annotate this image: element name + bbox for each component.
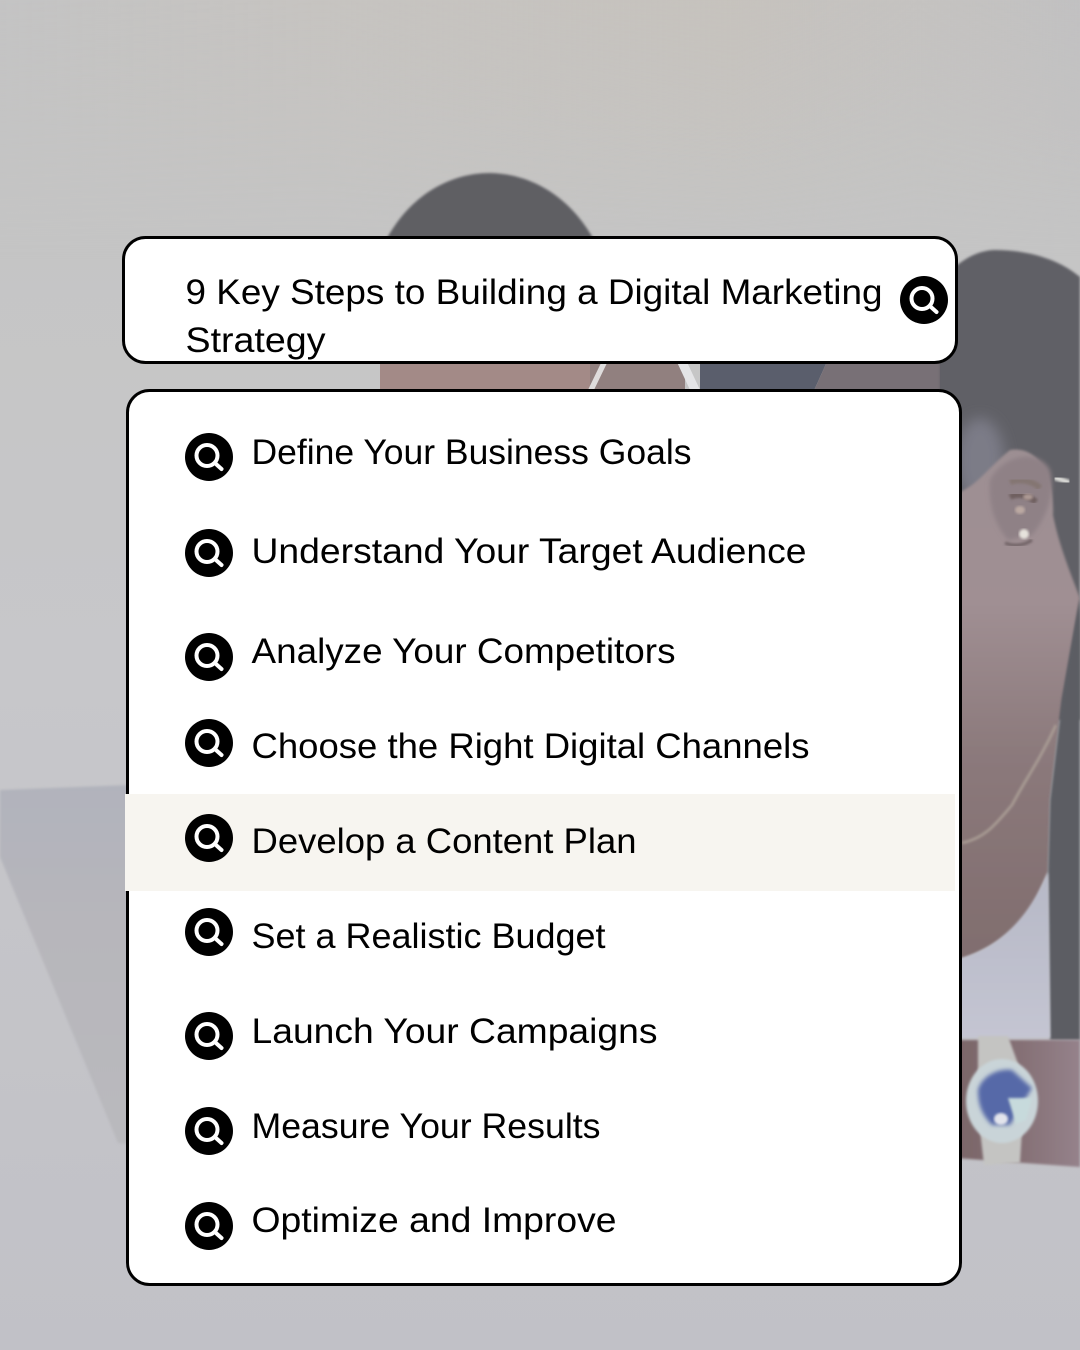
label: step 2: Understand Your Target Audience xyxy=(252,532,806,571)
title text: 9 Key Steps to Building a Digital Marketing xyxy=(186,273,882,312)
title text: Strategy xyxy=(186,321,326,360)
icon: search xyxy=(185,433,233,481)
icon: search xyxy=(185,529,233,577)
label: step 9: Optimize and Improve xyxy=(252,1201,616,1240)
highlighted row xyxy=(125,794,955,891)
woman: necklace xyxy=(962,725,1056,843)
step 3 xyxy=(185,632,676,681)
label: step 7: Launch Your Campaigns xyxy=(252,1012,658,1051)
step 5 xyxy=(185,814,636,862)
label: step 3: Analyze Your Competitors xyxy=(252,632,676,671)
icon: search xyxy=(185,1202,233,1250)
step 7 xyxy=(185,1012,658,1060)
step 2 xyxy=(185,529,806,577)
icon: search xyxy=(185,719,233,767)
step 4 xyxy=(185,719,810,767)
woman: white top xyxy=(955,872,1050,1038)
icon: search xyxy=(185,1107,233,1155)
woman: ear xyxy=(990,457,1068,545)
label: step 6: Set a Realistic Budget xyxy=(252,917,606,956)
step 1 xyxy=(185,433,692,481)
icon: search xyxy=(185,633,233,681)
woman: neck and shoulder skin xyxy=(950,450,1080,962)
icon: search magnifier xyxy=(900,276,948,324)
title text xyxy=(186,273,882,360)
icon: search xyxy=(185,814,233,862)
woman: jacket xyxy=(1048,598,1080,1040)
panel: search suggestions list xyxy=(125,390,960,1284)
laptop xyxy=(0,785,128,1144)
icon: search xyxy=(185,1012,233,1060)
woman: arm xyxy=(955,1040,1080,1167)
man at back xyxy=(380,173,970,395)
step 6 xyxy=(185,908,606,956)
step 8 xyxy=(185,1107,600,1155)
label: step 1: Define Your Business Goals xyxy=(252,433,692,472)
icon: search xyxy=(185,908,233,956)
step 9 xyxy=(185,1201,616,1250)
woman: hair xyxy=(940,250,1080,720)
search bar: title panel xyxy=(124,238,956,362)
woman: watch xyxy=(966,1036,1038,1165)
label: step 4: Choose the Right Digital Channels xyxy=(252,727,810,766)
label: step 8: Measure Your Results xyxy=(252,1107,600,1146)
label: step 5: Develop a Content Plan xyxy=(252,822,636,861)
